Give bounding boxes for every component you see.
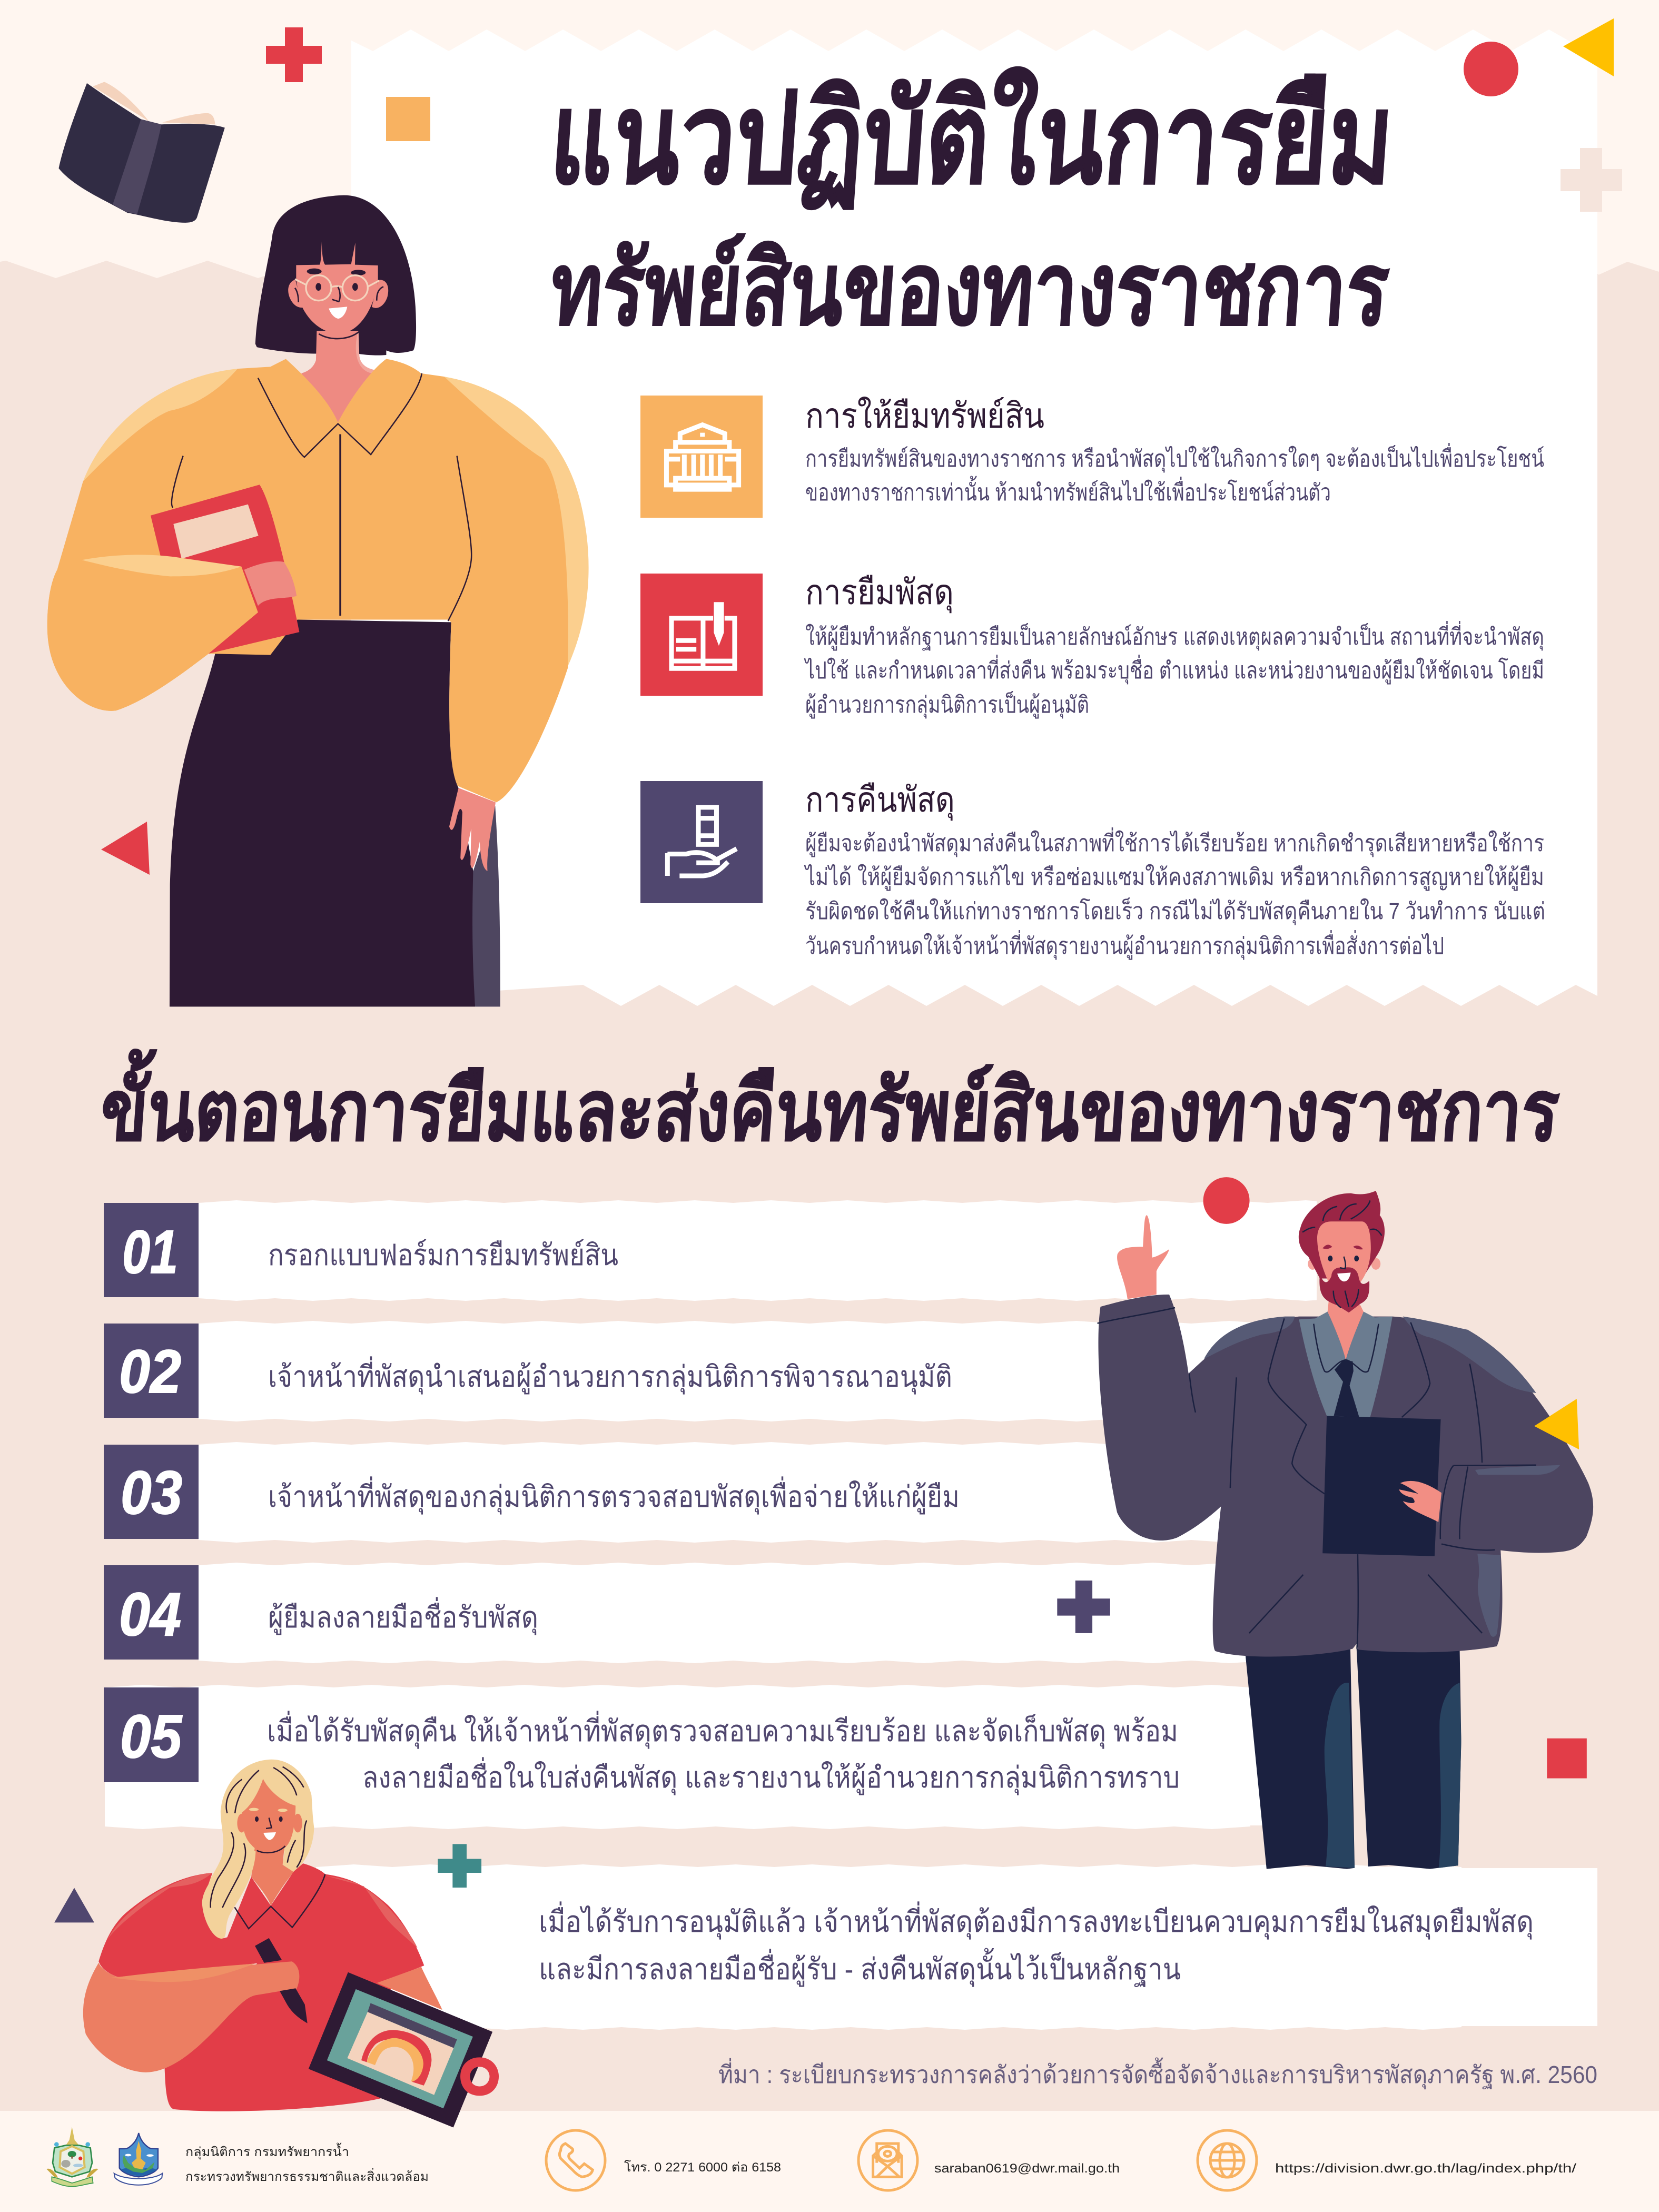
tablet	[309, 1972, 499, 2127]
logo: water resources department	[46, 2127, 98, 2187]
icon: hand holding item	[640, 781, 763, 903]
shirt	[1299, 1311, 1393, 1417]
hand	[449, 788, 496, 871]
heading: การยืมพัสดุ	[805, 572, 954, 614]
face	[237, 1779, 302, 1853]
icon: open book	[58, 82, 225, 223]
step 01	[104, 1203, 618, 1297]
top white panel	[351, 29, 1597, 1006]
title: แนวปฏิบัติในการยืม	[546, 66, 1398, 210]
neck and chest	[301, 331, 374, 422]
website contact: https://division.dwr.go.th/lag/index.php/th/	[1275, 2161, 1576, 2176]
title	[546, 66, 1398, 345]
arm	[83, 1961, 299, 2072]
body text	[804, 620, 1544, 719]
neck	[251, 1846, 294, 1905]
organisation name: กลุ่มนิติการ กรมทรัพยากรน้ำ	[185, 2142, 349, 2160]
email contact: saraban0619@dwr.mail.go.th	[934, 2161, 1120, 2176]
trousers	[1245, 1648, 1461, 1869]
body text: รับผิดชดใช้คืนให้แก่ทางราชการโดยเร็ว กรณีไม่ได้รับพัสดุคืนภายใน 7 วันทำการ นับแต่	[805, 897, 1545, 925]
email contact	[858, 2130, 1120, 2190]
step 03	[104, 1445, 960, 1539]
step 05	[104, 1687, 1180, 1795]
step 03: 03	[121, 1458, 182, 1527]
step 01: 01	[122, 1218, 178, 1286]
website contact	[1198, 2130, 1576, 2190]
blouse	[47, 359, 568, 802]
organisation name: กระทรวงทรัพยากรธรรมชาติและสิ่งแวดล้อม	[185, 2168, 429, 2184]
organisation name	[185, 2142, 429, 2184]
step 02: เจ้าหน้าที่พัสดุนำเสนอผู้อำนวยการกลุ่มนิติการพิจารณาอนุมัติ	[268, 1356, 952, 1395]
step 02: 02	[119, 1337, 181, 1406]
jacket lines	[1098, 1308, 1536, 1648]
note text: และมีการลงลายมือชื่อผู้รับ - ส่งคืนพัสดุนั้นไว้เป็นหลักฐาน	[539, 1948, 1181, 1987]
clipboard	[1322, 1416, 1441, 1556]
hand on clipboard	[1399, 1481, 1441, 1522]
step 05: 05	[120, 1702, 182, 1771]
step bands	[105, 1200, 1344, 1829]
woman face with glasses	[288, 241, 388, 339]
hair	[202, 1760, 314, 1939]
illustration: woman with book	[47, 195, 589, 1006]
body text: วันครบกำหนดให้เจ้าหน้าที่พัสดุรายงานผู้อำนวยการกลุ่มนิติการเพื่อสั่งการต่อไป	[805, 930, 1444, 960]
panel: returning supplies	[640, 780, 1545, 960]
body text: ไม่ได้ ให้ผู้ยืมจัดการแก้ไข หรือซ่อมแซมให้คงสภาพเดิม หรือหากเกิดการสูญหายให้ผู้ยืม	[804, 864, 1544, 891]
illustration: woman with tablet	[54, 1760, 499, 2127]
tie	[1334, 1360, 1359, 1417]
logo: ministry of natural resources	[114, 2133, 162, 2185]
skirt	[170, 619, 475, 1006]
hair back	[255, 195, 416, 355]
icon: building	[640, 396, 763, 518]
step 04: ผู้ยืมลงลายมือชื่อรับพัสดุ	[268, 1597, 538, 1635]
panel: lending assets	[640, 396, 1544, 518]
footer	[46, 2127, 1576, 2190]
note text: เมื่อได้รับการอนุมัติแล้ว เจ้าหน้าที่พัสดุต้องมีการลงทะเบียนควบคุมการยืมในสมุดยืมพัสดุ	[539, 1901, 1534, 1940]
pen	[255, 1938, 308, 2023]
heading: การให้ยืมทรัพย์สิน	[805, 396, 1044, 435]
step 01: กรอกแบบฟอร์มการยืมทรัพย์สิน	[268, 1238, 618, 1271]
step 04	[104, 1565, 538, 1660]
head	[1299, 1191, 1385, 1312]
step 05: ลงลายมือชื่อในใบส่งคืนพัสดุ และรายงานให้ผู้อำนวยการกลุ่มนิติการทราบ	[362, 1757, 1180, 1795]
hand pointing	[1117, 1215, 1169, 1299]
title: ทรัพย์สินของทางราชการ	[547, 232, 1393, 345]
phone contact	[546, 2130, 781, 2190]
step 04: 04	[119, 1580, 181, 1648]
body text: ผู้ยืมจะต้องนำพัสดุมาส่งคืนในสภาพที่ใช้การได้เรียบร้อย หากเกิดชำรุดเสียหายหรือใช้การ	[805, 827, 1544, 857]
body text: ผู้อำนวยการกลุ่มนิติการเป็นผู้อนุมัติ	[805, 691, 1089, 719]
step 02	[104, 1324, 952, 1418]
jacket	[1098, 1295, 1593, 1656]
body text	[804, 827, 1545, 960]
clothing lines	[172, 373, 471, 621]
shirt	[98, 1863, 424, 2111]
note band	[316, 1864, 1597, 2030]
icon: document and pen	[640, 574, 763, 696]
heading: การคืนพัสดุ	[805, 780, 955, 821]
illustration: man with clipboard	[1098, 1191, 1593, 1869]
step 05: เมื่อได้รับพัสดุคืน ให้เจ้าหน้าที่พัสดุตรวจสอบความเรียบร้อย และจัดเก็บพัสดุ พร้อม	[267, 1711, 1178, 1749]
hair front	[202, 1846, 255, 1939]
source: ที่มา : ระเบียบกระทรวงการคลังว่าด้วยการจัดซื้อจัดจ้างและการบริหารพัสดุภาครัฐ พ.ศ. 2560	[718, 2057, 1597, 2090]
clothing and hair lines	[211, 1767, 325, 1929]
arm over book	[47, 556, 258, 711]
body text: ของทางราชการเท่านั้น ห้ามนำทรัพย์สินไปใช้เพื่อประโยชน์ส่วนตัว	[805, 476, 1331, 506]
top decorations	[101, 18, 1622, 875]
sleeve highlights	[83, 369, 589, 668]
note text	[539, 1901, 1534, 1987]
body text	[805, 442, 1544, 506]
step 03: เจ้าหน้าที่พัสดุของกลุ่มนิติการตรวจสอบพัสดุเพื่อจ่ายให้แก่ผู้ยืม	[268, 1476, 960, 1515]
red book	[151, 485, 299, 654]
phone contact: โทร. 0 2271 6000 ต่อ 6158	[624, 2160, 781, 2175]
panel: borrowing supplies	[640, 572, 1544, 719]
lower right decorations	[1057, 1177, 1587, 1779]
